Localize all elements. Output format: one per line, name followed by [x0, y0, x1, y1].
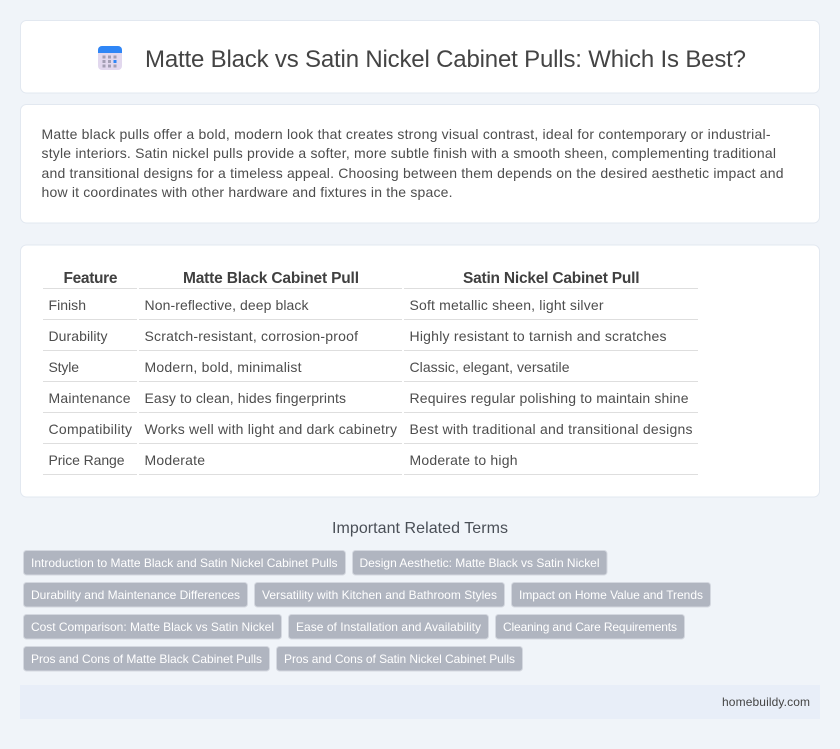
text block: summary	[42, 126, 784, 200]
table header row: Satin Nickel Cabinet Pull	[463, 270, 640, 287]
panel: summary text	[20, 104, 820, 223]
tag	[512, 582, 710, 607]
tag: Durability and Maintenance Differences	[31, 588, 240, 602]
row: style: Classic, elegant, versatile	[410, 359, 570, 375]
tag	[24, 582, 248, 607]
tag: Impact on Home Value and Trends	[519, 588, 703, 602]
tag	[254, 582, 504, 607]
tag: Cost Comparison: Matte Black vs Satin Nickel	[31, 620, 274, 634]
row: price range: Price Range	[48, 452, 125, 468]
tag: Pros and Cons of Matte Black Cabinet Pulls	[31, 652, 262, 666]
footer	[20, 685, 820, 719]
tag: Introduction to Matte Black and Satin Nickel Cabinet Pulls	[31, 556, 338, 570]
row: compatibility	[48, 421, 692, 437]
row: compatibility: Compatibility	[48, 421, 132, 437]
row: style: Style	[48, 359, 79, 375]
row: maintenance: Requires regular polishing to maintain shine	[410, 390, 689, 406]
tag: Ease of Installation and Availability	[296, 620, 481, 634]
panel: comparison table	[20, 245, 820, 497]
row: style: Modern, bold, minimalist	[144, 359, 302, 375]
table header row	[64, 270, 640, 287]
tag	[352, 550, 607, 575]
row: finish: Non-reflective, deep black	[144, 297, 310, 313]
row: durability	[48, 328, 666, 344]
row: maintenance: Easy to clean, hides fingerprints	[144, 390, 346, 406]
table header row: Feature	[64, 270, 118, 287]
tag: Cleaning and Care Requirements	[503, 620, 677, 634]
heading: related terms: Important Related Terms	[332, 520, 508, 537]
row: style	[48, 359, 570, 375]
row: finish: Finish	[48, 297, 86, 313]
row: price range	[48, 452, 518, 468]
text block: summary: Matte black pulls offer a bold, modern look that creates strong visual contrast, ideal for contemporary or industrial-	[42, 126, 771, 142]
icon: calendar	[98, 46, 122, 70]
tag	[24, 550, 346, 575]
tag	[496, 614, 684, 639]
text block: summary: style interiors. Satin nickel pulls provide a softer, more subtle finish with a smooth sheen, complementing traditional	[42, 145, 776, 161]
panel: header	[20, 20, 820, 93]
tag	[288, 614, 488, 639]
text block: summary: and transitional designs for a timeless appeal. Choosing between them depends on the desired aesthetic impact and	[42, 165, 784, 181]
table grid lines	[43, 288, 698, 474]
footer brand: homebuildy.com	[722, 695, 810, 709]
table header row: Matte Black Cabinet Pull	[183, 270, 359, 287]
row: price range: Moderate	[144, 452, 205, 468]
row: price range: Moderate to high	[410, 452, 518, 468]
row: durability: Durability	[48, 328, 108, 344]
title: Matte Black vs Satin Nickel Cabinet Pulls: Which Is Best?	[145, 46, 746, 73]
row: durability: Scratch-resistant, corrosion-proof	[144, 328, 358, 344]
tag	[24, 646, 270, 671]
row: maintenance: Maintenance	[48, 390, 131, 406]
row: compatibility: Works well with light and dark cabinetry	[144, 421, 397, 437]
row: durability: Highly resistant to tarnish and scratches	[410, 328, 666, 344]
row: compatibility: Best with traditional and transitional designs	[410, 421, 692, 437]
row: finish: Soft metallic sheen, light silver	[410, 297, 604, 313]
tag list: related terms	[24, 550, 710, 671]
tag: Versatility with Kitchen and Bathroom Styles	[262, 588, 497, 602]
tag: Design Aesthetic: Matte Black vs Satin Nickel	[360, 556, 600, 570]
tag	[24, 614, 282, 639]
text block: summary: how it coordinates with other hardware and fixtures in the space.	[42, 184, 452, 200]
row: finish	[48, 297, 604, 313]
row: maintenance	[48, 390, 689, 406]
tag: Pros and Cons of Satin Nickel Cabinet Pulls	[284, 652, 515, 666]
tag	[276, 646, 522, 671]
